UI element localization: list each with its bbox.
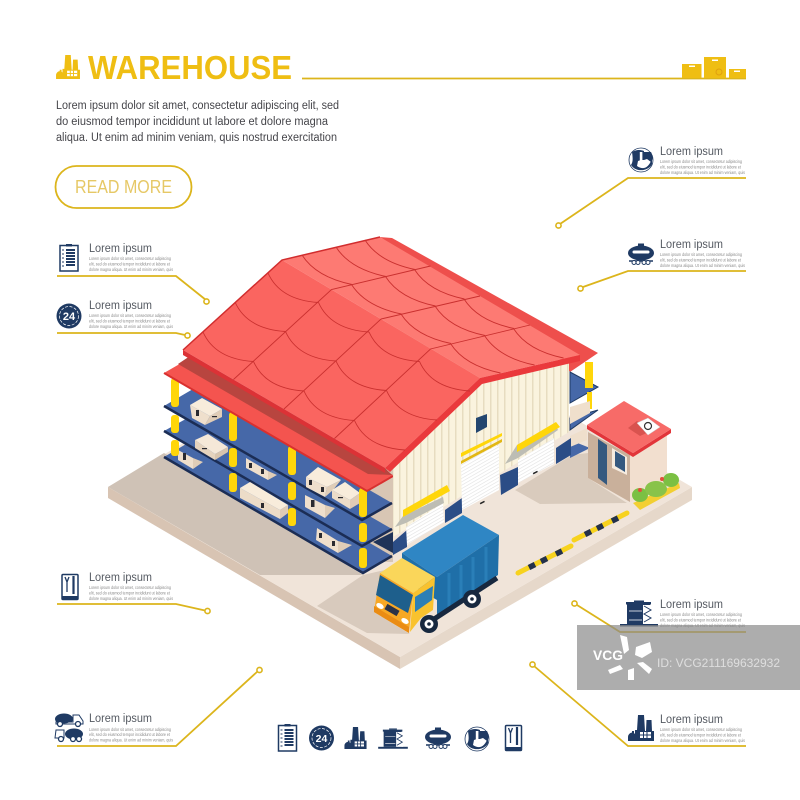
icon: rooftop fan: [637, 418, 660, 435]
icon: factory: [344, 727, 367, 749]
heading: Lorem ipsum: [660, 239, 723, 251]
truck: [374, 515, 499, 633]
leader line: [530, 662, 746, 746]
block: trucks: [55, 667, 262, 746]
icon: rail tanker: [628, 244, 654, 264]
bottom icon row: [278, 724, 522, 751]
description: dolore magna aliqua. Ut enim ad minim veniam, quis: [660, 170, 746, 175]
heading: Lorem ipsum: [660, 146, 723, 158]
heading: Lorem ipsum: [89, 572, 152, 584]
parking barriers: [518, 513, 627, 573]
icon: yellow boxes: [682, 57, 746, 78]
intro paragraph: aliqua. Ut enim ad minim veniam, quis nostrud exercitation: [56, 132, 337, 144]
guard hut: [587, 401, 671, 502]
leader line: [57, 604, 210, 614]
icon: globe: [465, 727, 489, 751]
intro paragraph: do eiusmod tempor incididunt ut labore et dolore magna: [56, 116, 329, 128]
leader line: [578, 271, 746, 291]
description: [89, 585, 174, 601]
cab: [374, 558, 435, 633]
description: elit, sed do eiusmod tempor incididunt ut labore et: [660, 618, 742, 622]
icon: clipboard: [60, 244, 78, 271]
icon: rail tanker: [425, 728, 451, 748]
rear rack: [570, 362, 598, 458]
description: [89, 313, 174, 329]
block: storage tank: [572, 599, 746, 632]
intro paragraph: Lorem ipsum dolor sit amet, consectetur adipiscing elit, sed: [56, 100, 339, 112]
icon: 24 hour clock: 24: [63, 311, 76, 323]
stored boxes: [178, 398, 360, 553]
icon: storage tank: [378, 728, 408, 749]
description: Lorem ipsum dolor sit amet, consectetur adipiscing: [660, 727, 742, 732]
title: WAREHOUSE: [88, 49, 292, 86]
planter with bushes: [632, 473, 680, 510]
leader line: [556, 178, 746, 228]
icon: globe: [629, 148, 653, 172]
description: elit, sed do eiusmod tempor incididunt ut labore et: [660, 732, 742, 738]
rack shelves: [164, 389, 393, 573]
warehouse illustration: [108, 237, 692, 669]
icon: 24 hour clock: [309, 726, 334, 750]
description: [660, 612, 746, 628]
read more button: READ MORE: [75, 177, 172, 197]
icon: tools: [506, 726, 522, 751]
watermark banner: [577, 625, 800, 690]
description: Lorem ipsum dolor sit amet, consectetur adipiscing: [660, 159, 742, 164]
icon: 24 hour clock: 24: [316, 733, 327, 745]
description: Lorem ipsum dolor sit amet, consectetur adipiscing: [89, 313, 171, 318]
leader line: [572, 601, 746, 632]
description: [660, 159, 746, 175]
read more button: [56, 166, 192, 208]
description: dolore magna aliqua. Ut enim ad minim veniam, quis: [89, 596, 174, 601]
wheels: [420, 590, 481, 633]
heading: Lorem ipsum: [89, 300, 152, 312]
description: Lorem ipsum dolor sit amet, consectetur adipiscing: [660, 612, 742, 617]
heading: Lorem ipsum: [89, 713, 152, 725]
description: elit, sed do eiusmod tempor incididunt ut labore et: [89, 590, 171, 596]
left dock door: [395, 485, 450, 545]
description: Lorem ipsum dolor sit amet, consectetur adipiscing: [660, 252, 742, 257]
description: dolore magna aliqua. Ut enim ad minim veniam, quis: [89, 738, 174, 742]
heading: Lorem ipsum: [660, 599, 723, 611]
ground slab: [108, 317, 692, 669]
leader line: [57, 667, 262, 746]
side wall: [362, 468, 393, 562]
description: elit, sed do eiusmod tempor incididunt ut labore et: [89, 262, 171, 266]
window: [476, 414, 487, 433]
description: [89, 727, 174, 742]
description: Lorem ipsum dolor sit amet, consectetur adipiscing: [89, 585, 171, 590]
icon: tools: [62, 574, 78, 600]
right dock door: [505, 422, 560, 483]
description: Lorem ipsum dolor sit amet, consectetur adipiscing: [89, 727, 171, 732]
description: dolore magna aliqua. Ut enim ad minim veniam, quis: [660, 738, 746, 743]
icon: mixer trucks: [55, 714, 83, 742]
leader line: [57, 276, 209, 304]
watermark banner: VCG: [593, 647, 623, 663]
block: 24 hours: [56, 300, 190, 338]
gable wall: [393, 362, 571, 555]
icon: factory: [628, 715, 654, 741]
description: elit, sed do eiusmod tempor incididunt ut labore et: [89, 318, 171, 324]
description: [89, 256, 174, 272]
icon: storage tank: [620, 600, 658, 626]
leader line: [57, 333, 190, 338]
description: dolore magna aliqua. Ut enim ad minim veniam, quis: [89, 267, 174, 272]
main roof: [183, 237, 580, 473]
heading: Lorem ipsum: [89, 243, 152, 255]
description: elit, sed do eiusmod tempor incididunt ut labore et: [660, 164, 742, 170]
heading: Lorem ipsum: [660, 714, 723, 726]
block: clipboard: [57, 243, 209, 304]
rack posts: [171, 378, 367, 568]
block: tools: [57, 572, 210, 614]
description: Lorem ipsum dolor sit amet, consectetur adipiscing: [89, 256, 171, 261]
description: [660, 727, 746, 743]
lower canopy: [164, 356, 393, 491]
description: dolore magna aliqua. Ut enim ad minim veniam, quis: [660, 263, 746, 268]
rear canopy: [380, 237, 598, 372]
block: rail tanker: [578, 239, 746, 291]
intro paragraph: [56, 100, 339, 144]
block: factory: [530, 662, 746, 746]
center dock door: [461, 433, 502, 510]
cargo box: [402, 515, 499, 617]
icon: clipboard: [278, 724, 296, 751]
header rule: [302, 78, 746, 80]
block: globe: [556, 146, 746, 228]
icon: yellow factory: [56, 55, 80, 79]
watermark banner: ID: VCG211169632932: [657, 656, 780, 670]
description: elit, sed do eiusmod tempor incididunt ut labore et: [660, 258, 742, 262]
chassis: [425, 578, 497, 625]
description: [660, 252, 746, 268]
description: elit, sed do eiusmod tempor incididunt ut labore et: [89, 732, 171, 737]
description: dolore magna aliqua. Ut enim ad minim veniam, quis: [89, 324, 174, 329]
description: dolore magna aliqua. Ut enim ad minim veniam, quis: [660, 623, 746, 628]
